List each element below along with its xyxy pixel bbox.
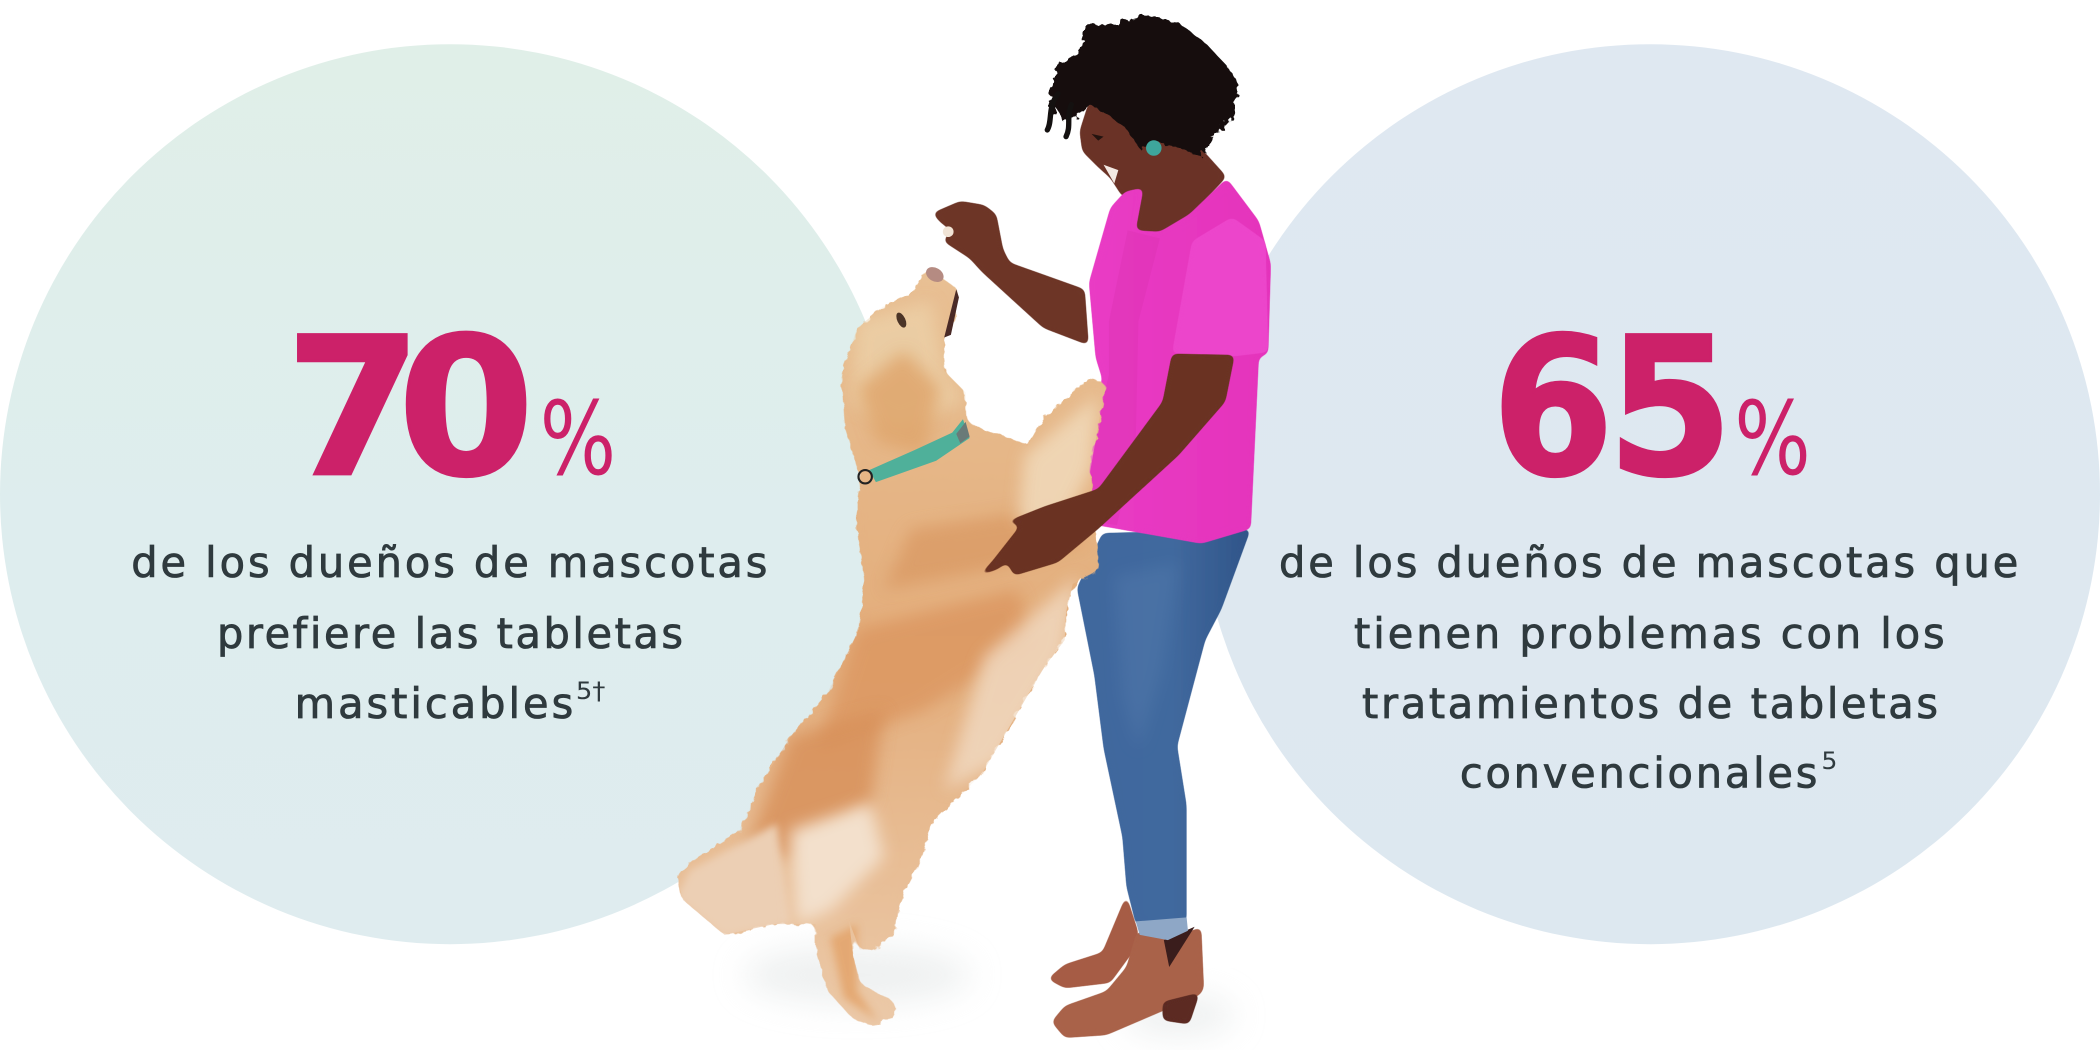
woman: boots [1047,895,1204,1038]
left description text: prefiere las tabletas [217,609,683,658]
dog: fur shading [676,301,1098,1021]
dog: mouth [944,289,959,338]
big number 70 percent: 0 [398,297,534,520]
big number 65 percent [1492,297,1811,520]
big number 65 percent: % [1734,381,1811,499]
dog: nose [923,264,946,285]
ground shadows [743,946,1235,1037]
dog: teal collar [858,419,970,483]
left description text: de los dueños de mascotas [131,538,767,587]
left description text: masticables [295,679,573,728]
panel: left statistic [0,44,900,944]
illustration: dog [676,264,1108,1026]
big number 70 percent: 7 [285,297,422,520]
right circle background [1200,44,2100,944]
illustration: woman lower arm and hand over dog [976,354,1235,577]
right description text [1279,538,2018,798]
woman: earring [1146,140,1162,156]
right description text: de los dueños de mascotas que [1279,538,2018,587]
woman: eye [1092,134,1104,141]
left circle background [0,44,900,944]
woman: raised arm and hand [932,201,1089,346]
right description text: tienen problemas con los [1354,609,1945,658]
right description text: 5 [1821,747,1837,775]
left description text [131,538,767,728]
big number 65 percent: 6 [1492,297,1614,520]
woman: mouth [1104,165,1118,183]
big number 70 percent [285,297,616,520]
woman: neck and face [1079,102,1227,236]
illustration: woman [932,15,1271,1038]
dog: body fur [676,267,1108,1026]
left description text: 5† [576,677,605,705]
panel: right statistic [1200,44,2100,944]
big number 65 percent: 5 [1607,297,1733,520]
right description text: tratamientos de tabletas [1362,679,1938,728]
dog: eye [894,311,908,329]
woman: hair [1047,15,1239,157]
big number 70 percent: % [540,381,616,499]
right description text: convencionales [1460,749,1817,798]
woman: jeans [1077,529,1251,940]
woman: pink blouse [1081,178,1271,544]
